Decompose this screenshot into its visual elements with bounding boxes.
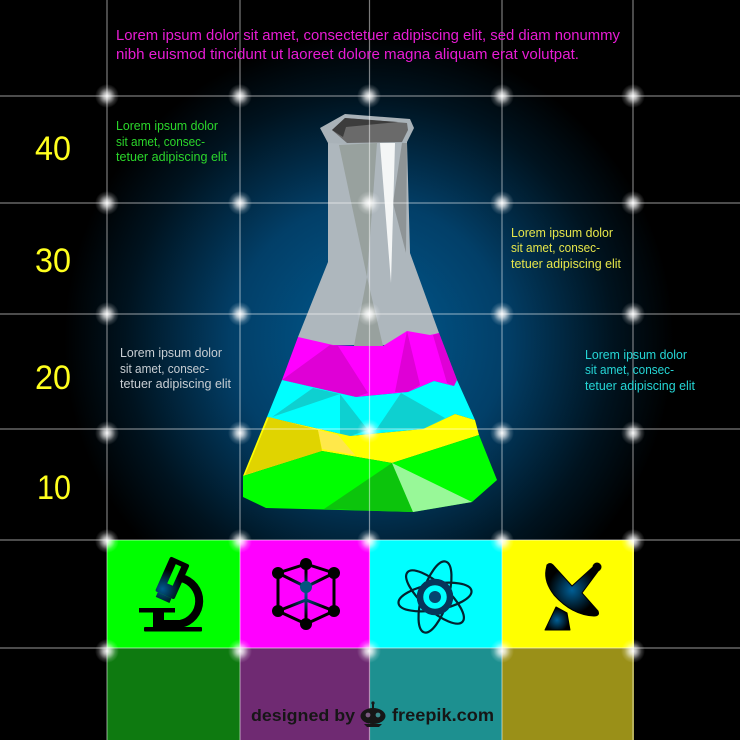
liquid: yellow layer	[243, 414, 479, 476]
icon: molecular cube	[272, 558, 340, 630]
title text: Lorem ipsum dolor sit amet, consectetuer adipiscing elit, sed diam nonummy	[116, 27, 620, 44]
title text: nibh euismod tincidunt ut laoreet dolore magna aliquam erat volutpat.	[116, 46, 579, 63]
icon: microscope	[139, 556, 202, 632]
liquid: cyan layer	[267, 380, 475, 436]
icon: atom	[396, 558, 474, 636]
grey text block	[120, 346, 232, 391]
footer credit	[251, 701, 494, 727]
flask	[243, 114, 497, 512]
yellow text block	[511, 226, 622, 271]
grey text block: Lorem ipsum dolor	[120, 346, 222, 360]
grid intersection glows	[95, 84, 645, 663]
yellow text block: Lorem ipsum dolor	[511, 226, 613, 240]
grey text block: tetuer adipiscing elit	[120, 377, 232, 391]
flask opening shadow	[332, 118, 398, 137]
liquid: green layer	[243, 435, 497, 512]
title text	[116, 27, 620, 63]
neck shadow right	[393, 143, 407, 253]
liquid: magenta layer	[282, 331, 457, 397]
footer credit: freepik.com	[392, 705, 494, 725]
color squares row	[107, 540, 634, 648]
flask opening	[332, 118, 408, 143]
axis numbers: 40	[35, 130, 71, 168]
green text block: tetuer adipiscing elit	[116, 150, 228, 164]
yellow text block: sit amet, consec-	[511, 241, 600, 255]
cyan text block: Lorem ipsum dolor	[585, 348, 687, 362]
green text block	[116, 119, 228, 164]
neck highlight	[380, 143, 395, 283]
yellow text block: tetuer adipiscing elit	[511, 257, 622, 271]
icon: satellite dish	[545, 562, 602, 630]
footer credit: designed by	[251, 706, 356, 725]
axis numbers: 30	[35, 242, 71, 280]
cyan text block: tetuer adipiscing elit	[585, 379, 696, 393]
icon: freepik logo	[360, 701, 386, 727]
lower shadow	[354, 277, 383, 346]
axis numbers: 10	[37, 469, 71, 507]
green text block: sit amet, consec-	[116, 135, 205, 149]
neck shadow left	[339, 143, 377, 277]
darker bars row	[107, 648, 634, 740]
axis numbers: 20	[35, 359, 71, 397]
flask glass body	[298, 142, 439, 345]
grey text block: sit amet, consec-	[120, 362, 209, 376]
flask rim	[320, 114, 414, 144]
cyan text block	[585, 348, 696, 393]
cyan text block: sit amet, consec-	[585, 363, 674, 377]
axis numbers	[35, 130, 71, 507]
green text block: Lorem ipsum dolor	[116, 119, 218, 133]
